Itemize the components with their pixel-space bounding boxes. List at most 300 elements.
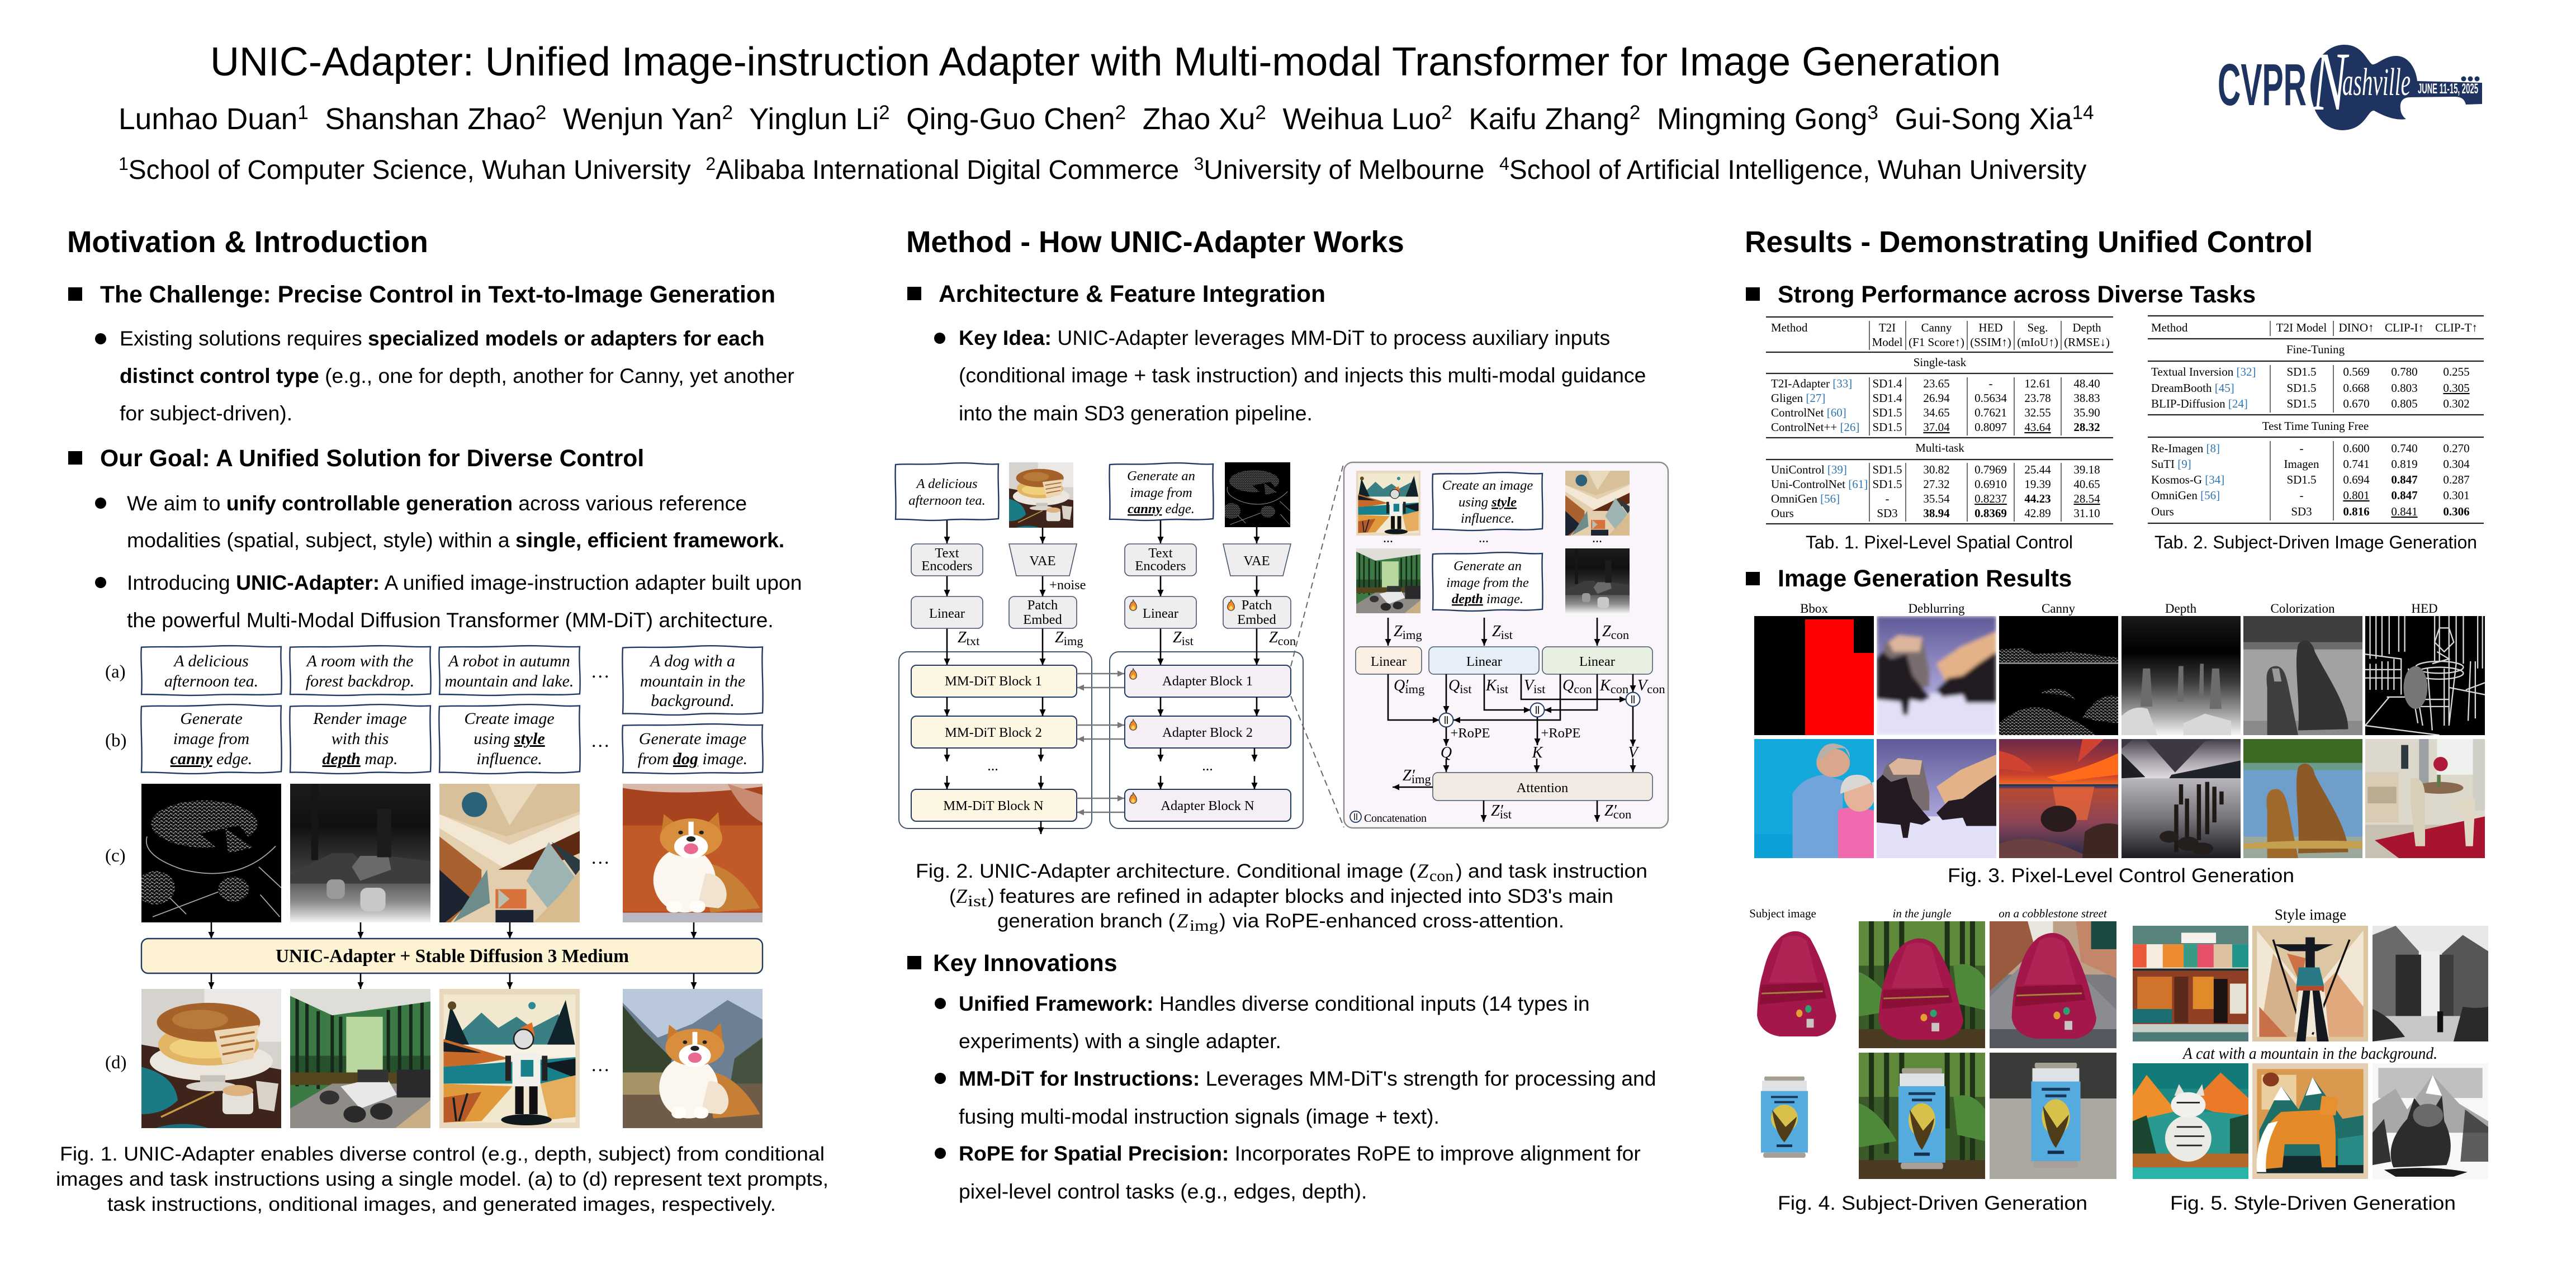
table 2 header: CLIP-I↑	[2385, 321, 2424, 334]
affiliations: 3	[1194, 154, 1204, 174]
row b: task instructions: from dog image.	[638, 750, 747, 768]
input arrows: Z	[1492, 623, 1501, 640]
row labels: (d)	[105, 1053, 126, 1073]
subsection: key innovations: RoPE for Spatial Precision: Incorporates RoPE to improve alignment for	[959, 1142, 1641, 1165]
caption: table 2: Tab. 2. Subject-Driven Image Generation	[2154, 532, 2477, 552]
figure 3 column labels	[1800, 602, 2438, 615]
diagram: architecture left	[895, 462, 1303, 834]
QKV wiring: Q	[1562, 677, 1574, 694]
caption: figure 2: features are refined in adapter blocks and injected into SD3's main	[1000, 886, 1613, 907]
row a: text prompts: afternoon tea.	[164, 672, 258, 690]
table 2 rows: 0.287	[2443, 473, 2470, 486]
table 1 rows: SD1.5	[1872, 463, 1902, 476]
subsection: our goal: the powerful Multi-Modal Diffusion Transformer (MM-DiT) architecture.	[127, 608, 774, 632]
QKV wiring: V	[1628, 744, 1639, 761]
row a: text prompts: background.	[651, 692, 735, 710]
linear and patch embed row: Linear	[929, 606, 965, 621]
figure 3 column labels: Deblurring	[1909, 602, 1965, 615]
caption: figure 1: images and task instructions using a single model. (a) to (d) represent text prompts,	[56, 1168, 828, 1190]
figure 3 column labels: Colorization	[2271, 602, 2335, 615]
subsection: our goal: modalities (spatial, subject, style) within a single, efficient framework.	[127, 528, 784, 552]
subsection: the challenge	[68, 281, 794, 425]
table 1 rows: Uni-ControlNet [61]	[1771, 477, 1868, 491]
table 1 rows: 0.8097	[1974, 420, 2007, 434]
affiliations: School of Artificial Intelligence, Wuhan University	[1509, 155, 2086, 185]
table 2 rows: 0.305	[2443, 381, 2470, 395]
authors: Qing-Guo Chen	[890, 103, 1115, 136]
QKV wiring: ist	[1460, 682, 1472, 696]
caption: figure 2: Z	[956, 885, 968, 907]
style example row: Create an image	[1442, 478, 1533, 493]
linear and patch embed row: Patch	[1027, 598, 1058, 613]
table 1 header: (SSIM↑)	[1970, 335, 2011, 349]
table 1 rows: 34.65	[1923, 406, 1950, 419]
adapter blocks: Adapter Block 2	[1162, 725, 1253, 740]
style example row: ...	[1479, 531, 1489, 546]
table 1 rows: 48.40	[2073, 377, 2100, 390]
feature labels: ist	[1182, 634, 1194, 648]
table 2 rows: 0.670	[2343, 397, 2370, 410]
figure 3 column labels: Canny	[2042, 602, 2076, 615]
caption: figure 2: and task instruction	[1468, 860, 1647, 882]
row b: task instructions: influence.	[476, 750, 542, 768]
QKV wiring: img	[1405, 682, 1424, 696]
block arrows: ...	[987, 757, 998, 774]
input arrows	[1388, 618, 1629, 646]
table 1 rows: 0.6910	[1974, 477, 2007, 491]
table 2 rows: 0.668	[2343, 381, 2370, 395]
row b: task instructions	[141, 704, 763, 774]
table 1 rows: ControlNet [60]	[1771, 406, 1846, 419]
caption: table 1: Tab. 1. Pixel-Level Spatial Control	[1806, 532, 2073, 552]
input arrows: Z	[1394, 623, 1403, 640]
row a: text prompts: ...	[591, 661, 610, 682]
table 2 rows: OmniGen [56]	[2151, 489, 2220, 502]
QKV wiring: K	[1532, 744, 1543, 761]
panel: motivation and introduction	[56, 226, 828, 1215]
figure 4 labels: on a cobblestone street	[1999, 907, 2108, 920]
table 2 rows: 0.740	[2391, 442, 2418, 455]
table 1 rows: 23.78	[2024, 391, 2051, 405]
table 2 rows: 0.301	[2443, 489, 2470, 502]
figure 4 labels	[1749, 907, 2108, 920]
QKV wiring: V	[1524, 677, 1535, 694]
style outputs row	[2133, 1063, 2488, 1179]
arrows out of model bar	[211, 973, 694, 989]
encoders row: VAE	[1029, 553, 1056, 569]
encoders row	[911, 544, 1291, 593]
linear projections	[1356, 647, 1652, 674]
table 1 rows: SD1.5	[1872, 477, 1902, 491]
MM-DiT blocks: MM-DiT Block N	[943, 798, 1044, 813]
arrows: inputs	[947, 520, 1257, 665]
subsection: key innovations: MM-DiT for Instructions: Leverages MM-DiT's strength for processing and	[959, 1067, 1656, 1090]
table 1: pixel-level spatial control	[1766, 317, 2113, 552]
affiliations: 2	[705, 154, 716, 174]
attention block	[1433, 773, 1652, 801]
subsection: key innovations: experiments) with a single adapter.	[959, 1029, 1281, 1053]
table 2 rows: SD3	[2291, 505, 2312, 518]
subsection: the challenge: The Challenge: Precise Control in Text-to-Image Generation	[100, 281, 775, 308]
concatenation legend: Concatenation	[1364, 812, 1427, 825]
table 2 rows: Imagen	[2284, 457, 2319, 471]
linear and patch embed row: Embed	[1237, 612, 1276, 627]
table 2 rows: 0.270	[2443, 442, 2470, 455]
feature labels: Z	[958, 629, 967, 646]
subject: backpack	[1757, 921, 2116, 1048]
table 1 header: Multi-task	[1915, 441, 1964, 454]
row a: text prompts: mountain in the	[640, 672, 745, 690]
depth example row	[1356, 548, 1630, 613]
logo: CVPR Nashville guitar: JUNE 11-15, 2025	[2418, 81, 2478, 97]
style references row	[2133, 926, 2488, 1041]
caption: figure 2: Z	[1417, 860, 1429, 882]
table 1 header: T2I	[1879, 321, 1896, 334]
row a: text prompts: A dog with a	[649, 652, 735, 670]
table 2 rows: 0.803	[2391, 381, 2418, 395]
row a: text prompts: A robot in autumn	[447, 652, 570, 670]
caption: figure 5: Fig. 5. Style-Driven Generation	[2170, 1192, 2456, 1214]
caption: figure 3: Fig. 3. Pixel-Level Control Generation	[1948, 865, 2294, 887]
MM-DiT blocks: MM-DiT Block 1	[945, 674, 1042, 689]
table 1 rows: SD1.4	[1872, 377, 1902, 390]
subsection: key innovations: Key Innovations	[933, 950, 1117, 977]
table 2 header	[2151, 321, 2478, 433]
table 1 rows: -	[1989, 377, 1992, 390]
caption: figure 1: Fig. 1. UNIC-Adapter enables diverse control (e.g., depth, subject) from conditional	[60, 1143, 825, 1165]
encoders row: Text	[935, 546, 959, 561]
table 1 rows: 23.65	[1923, 377, 1950, 390]
feature labels: Z	[1173, 629, 1182, 646]
panel: method	[895, 226, 1668, 1203]
authors: 2	[1630, 102, 1640, 124]
style example row	[1356, 471, 1630, 546]
linear and patch embed row	[911, 596, 1291, 628]
figure 3 column labels: Bbox	[1800, 602, 1828, 615]
attention outputs: Z′	[1604, 802, 1617, 820]
row b: task instructions: Create image	[464, 709, 555, 728]
style image label: Style image	[2275, 906, 2346, 923]
QKV wiring: V	[1637, 677, 1649, 694]
figure 4: subject-driven generation	[1749, 907, 2116, 1214]
affiliations: 4	[1499, 154, 1509, 174]
depth example row: depth image.	[1452, 591, 1523, 607]
table 1 header: (mIoU↑)	[2017, 335, 2058, 349]
style example row: influence.	[1461, 511, 1514, 526]
table 2 rows: -	[2300, 442, 2303, 455]
affiliations: 1	[119, 154, 129, 174]
table 1 rows: SD1.5	[1872, 420, 1902, 434]
figure 3 column labels: HED	[2411, 602, 2438, 615]
prompts and input images: A delicious	[915, 476, 978, 491]
authors: Mingming Gong	[1640, 103, 1867, 136]
MM-DiT blocks	[911, 665, 1077, 821]
row labels: (b)	[105, 731, 126, 751]
table 2 header: T2I Model	[2276, 321, 2327, 334]
table 2 rows: 0.306	[2443, 505, 2470, 518]
input arrows: con	[1611, 628, 1629, 642]
table 2 rows: SD1.5	[2286, 365, 2317, 378]
caption: figure 2: (	[949, 886, 956, 907]
table 1 rows: -	[1885, 492, 1890, 505]
table 1 rows: ControlNet++ [26]	[1771, 420, 1859, 434]
encoders row: Text	[1148, 546, 1173, 561]
authors: Weihua Luo	[1266, 103, 1441, 136]
logo: CVPR Nashville guitar: ashville	[2342, 61, 2411, 104]
row labels	[105, 662, 126, 1073]
QKV wiring: Q	[1448, 677, 1460, 694]
figure 3 conditions row	[1754, 616, 2485, 735]
QKV wiring: K	[1485, 677, 1497, 694]
caption: figure 2: )	[1219, 910, 1226, 932]
affiliations: University of Melbourne	[1204, 155, 1499, 185]
feature labels: Z	[1269, 629, 1278, 646]
table 1 rows: 28.32	[2073, 420, 2100, 434]
table 2 header: CLIP-T↑	[2435, 321, 2478, 334]
prompts and input images: Generate an	[1127, 468, 1195, 484]
subsection: our goal: We aim to unify controllable generation across various reference	[127, 491, 747, 515]
logo: CVPR Nashville guitar	[2218, 35, 2482, 130]
table 2 rows: 0.819	[2391, 457, 2418, 471]
authors: Gui-Song Xia	[1878, 103, 2072, 136]
heading: results: Results - Demonstrating Unified Control	[1745, 226, 2313, 259]
table 2 header: DINO↑	[2339, 321, 2374, 334]
heading: motivation: Motivation & Introduction	[67, 226, 428, 259]
table 1 rows: 44.23	[2024, 492, 2051, 505]
QKV wiring: K	[1599, 677, 1611, 694]
row b: task instructions: Render image	[312, 709, 407, 728]
subsection: image generation results: Image Generation Results	[1778, 565, 2072, 592]
row a: text prompts: A delicious	[173, 652, 249, 670]
panel: results	[1745, 226, 2488, 1214]
attention outputs	[1393, 767, 1631, 822]
input arrows: ist	[1501, 628, 1513, 642]
linear and patch embed row: Patch	[1242, 598, 1272, 613]
table 2 rows: 0.302	[2443, 397, 2470, 410]
table 2 rows: -	[2300, 489, 2303, 502]
subsection: key innovations	[907, 950, 1656, 1203]
authors: 2	[879, 102, 890, 124]
table 1 rows: 0.5634	[1974, 391, 2007, 405]
QKV wiring: Q′	[1394, 677, 1409, 694]
subsection: architecture: Architecture & Feature Integration	[939, 281, 1325, 307]
table 2 rows: 0.801	[2343, 489, 2370, 502]
table 1 rows: 35.54	[1923, 492, 1950, 505]
dashed zoom lines	[1291, 462, 1344, 827]
table 2 rows: 0.847	[2391, 489, 2418, 502]
authors: Shanshan Zhao	[309, 103, 536, 136]
block arrows	[947, 674, 1257, 834]
table 1 rows: 37.04	[1923, 420, 1950, 434]
QKV wiring: con	[1611, 682, 1628, 696]
table 1 header: (F1 Score↑)	[1909, 335, 1964, 349]
table 1 header: Canny	[1921, 321, 1952, 334]
QKV wiring: ist	[1533, 682, 1546, 696]
prompts and input images: afternoon tea.	[908, 493, 986, 508]
authors: 2	[1255, 102, 1266, 124]
QKV wiring: +RoPE	[1450, 726, 1490, 741]
row b: task instructions: canny edge.	[171, 750, 252, 768]
table 2 rows: BLIP-Diffusion [24]	[2151, 397, 2248, 410]
MM-DiT blocks: MM-DiT Block 2	[945, 725, 1042, 740]
caption: figure 2: img	[1190, 917, 1218, 935]
table 2 header: Method	[2151, 321, 2188, 334]
linear projections: Linear	[1466, 654, 1502, 669]
adapter blocks: Adapter Block 1	[1162, 674, 1253, 689]
table 1 rows: Gligen [27]	[1771, 391, 1825, 405]
row a: text prompts: mountain and lake.	[445, 672, 574, 690]
row b: task instructions: Generate	[180, 709, 243, 728]
subsection: the challenge: Existing solutions requires specialized models or adapters for each	[120, 326, 765, 350]
subsection: architecture: (conditional image + task instruction) and injects this multi-modal guidance	[959, 363, 1646, 387]
QKV wiring	[1388, 674, 1665, 772]
affiliations: Alibaba International Digital Commerce	[716, 155, 1194, 185]
table 1 rows: 26.94	[1923, 391, 1950, 405]
row c: conditional images	[136, 784, 763, 922]
table 2 rows: 0.255	[2443, 365, 2470, 378]
caption: figure 2: Fig. 2. UNIC-Adapter architecture. Conditional image (	[916, 860, 1416, 882]
table 2 rows: 0.304	[2443, 457, 2470, 471]
model bar: UNIC-Adapter + Stable Diffusion 3 Medium	[276, 946, 629, 967]
table 2 rows: SD1.5	[2286, 473, 2317, 486]
caption: figure 1	[56, 1143, 828, 1215]
table 1 rows: 39.18	[2073, 463, 2100, 476]
table 1 rows: 12.61	[2024, 377, 2051, 390]
figure 4 labels: Subject image	[1749, 907, 1816, 920]
feature labels: img	[1064, 634, 1083, 648]
authors: 1	[297, 102, 309, 124]
figure 4 labels: in the jungle	[1893, 907, 1951, 920]
depth example row: Generate an	[1453, 558, 1522, 574]
table 1 header: Seg.	[2028, 321, 2048, 334]
table 2 rows	[2151, 365, 2470, 518]
QKV wiring: +RoPE	[1541, 726, 1581, 741]
logo: CVPR Nashville guitar: N	[2312, 35, 2349, 128]
table 2 rows: 0.841	[2391, 505, 2418, 518]
table 1 header: Method	[1771, 321, 1808, 334]
table 1 rows: T2I-Adapter [33]	[1771, 377, 1852, 390]
table 1 rows: OmniGen [56]	[1771, 492, 1840, 505]
table 2 rows: SD1.5	[2286, 397, 2317, 410]
attention outputs: img	[1412, 772, 1431, 786]
authors: 3	[1867, 102, 1878, 124]
input arrows: Z	[1602, 623, 1611, 640]
table 1 rows: 38.94	[1923, 506, 1950, 520]
row a: text prompts: A room with the	[306, 652, 413, 670]
caption: figure 2	[916, 860, 1647, 935]
authors: 2	[536, 102, 546, 124]
table 2 rows: Ours	[2151, 505, 2174, 518]
table 2 rows: 0.600	[2343, 442, 2370, 455]
table 2 rows: SuTI [9]	[2151, 457, 2191, 471]
row b: task instructions: depth map.	[322, 750, 398, 768]
authors: 2	[1441, 102, 1452, 124]
table 2 rows: Textual Inversion [32]	[2151, 365, 2256, 378]
row b: task instructions: with this	[332, 730, 389, 748]
prompts and input images	[895, 462, 1290, 528]
prompts and input images: image from	[1130, 485, 1192, 500]
row b: task instructions: image from	[173, 730, 249, 748]
containers	[899, 652, 1303, 828]
style example row: using style	[1459, 495, 1517, 510]
prompt text: A cat with a mountain in the background.	[2182, 1044, 2437, 1063]
table 2 rows: 0.741	[2343, 457, 2370, 471]
table 2 rows: DreamBooth [45]	[2151, 381, 2234, 395]
row labels: (a)	[105, 662, 126, 682]
subsection: architecture	[907, 281, 1646, 425]
authors: Wenjun Yan	[546, 103, 722, 136]
table 1 rows: SD3	[1877, 506, 1898, 520]
row d: generated images	[141, 989, 763, 1128]
QKV wiring: con	[1647, 682, 1665, 696]
authors: Zhao Xu	[1126, 103, 1255, 136]
row a: text prompts: forest backdrop.	[306, 672, 414, 690]
table 2 header: Test Time Tuning Free	[2262, 419, 2369, 433]
caption: figure 2: ist	[968, 893, 987, 910]
authors: 2	[722, 102, 733, 124]
style example row: ...	[1592, 531, 1602, 546]
subsection: our goal: Our Goal: A Unified Solution for Diverse Control	[100, 445, 644, 472]
feature labels: con	[1278, 634, 1296, 648]
row c: conditional images: ...	[591, 847, 610, 868]
table 1 rows: 19.39	[2024, 477, 2051, 491]
caption: figure 2: Z	[1177, 910, 1188, 932]
table 2 rows: 0.780	[2391, 365, 2418, 378]
table 1 rows: UniControl [39]	[1771, 463, 1847, 476]
figure 5: style-driven generation	[2133, 906, 2488, 1214]
row b: task instructions: using style	[473, 730, 545, 748]
encoders row: Encoders	[921, 558, 973, 574]
row labels: (c)	[105, 846, 126, 866]
logo: CVPR Nashville guitar: CVPR	[2218, 52, 2307, 118]
attention outputs: Z′	[1403, 767, 1415, 784]
table 1 rows: SD1.5	[1872, 406, 1902, 419]
row a: text prompts	[141, 646, 763, 715]
feature labels: Z	[1055, 629, 1064, 646]
table 1 rows: 27.32	[1923, 477, 1950, 491]
style example row: ...	[1383, 531, 1393, 546]
table 1 rows	[1771, 377, 2100, 520]
table 2 rows: 0.569	[2343, 365, 2370, 378]
title: UNIC-Adapter: Unified Image-instruction Adapter with Multi-modal Transformer for Image Generation	[210, 40, 2001, 84]
attention outputs: ist	[1500, 807, 1512, 821]
encoders row: Encoders	[1135, 558, 1186, 574]
diagram: adapter block detail	[1344, 462, 1668, 828]
authors: Yinglun Li	[733, 103, 879, 136]
caption: figure 2: )	[1456, 860, 1462, 882]
table 1 rows: 28.54	[2073, 492, 2100, 505]
table 1 header	[1771, 321, 2110, 454]
table 1 header: Model	[1872, 335, 1903, 349]
table 2 header: Fine-Tuning	[2286, 343, 2345, 356]
caption: figure 2: via RoPE-enhanced cross-attention.	[1233, 910, 1564, 932]
table 2 rows: 0.805	[2391, 397, 2418, 410]
caption: figure 2: )	[988, 886, 995, 907]
attention block: Attention	[1517, 780, 1568, 795]
attention outputs: Z′	[1491, 802, 1504, 820]
table 2: subject-driven image generation	[2148, 316, 2484, 552]
encoders row: VAE	[1243, 553, 1270, 569]
table 2 rows: SD1.5	[2286, 381, 2317, 395]
adapter blocks	[1125, 665, 1291, 821]
encoders row: +noise	[1049, 577, 1086, 593]
QKV wiring: Q	[1441, 744, 1452, 761]
table 1 header: Single-task	[1914, 356, 1967, 369]
figure 3 generated row	[1754, 739, 2485, 858]
subject: beer can	[1761, 1053, 2116, 1179]
table 1 rows: 0.7969	[1974, 463, 2007, 476]
table 1 header: HED	[1978, 321, 2003, 334]
